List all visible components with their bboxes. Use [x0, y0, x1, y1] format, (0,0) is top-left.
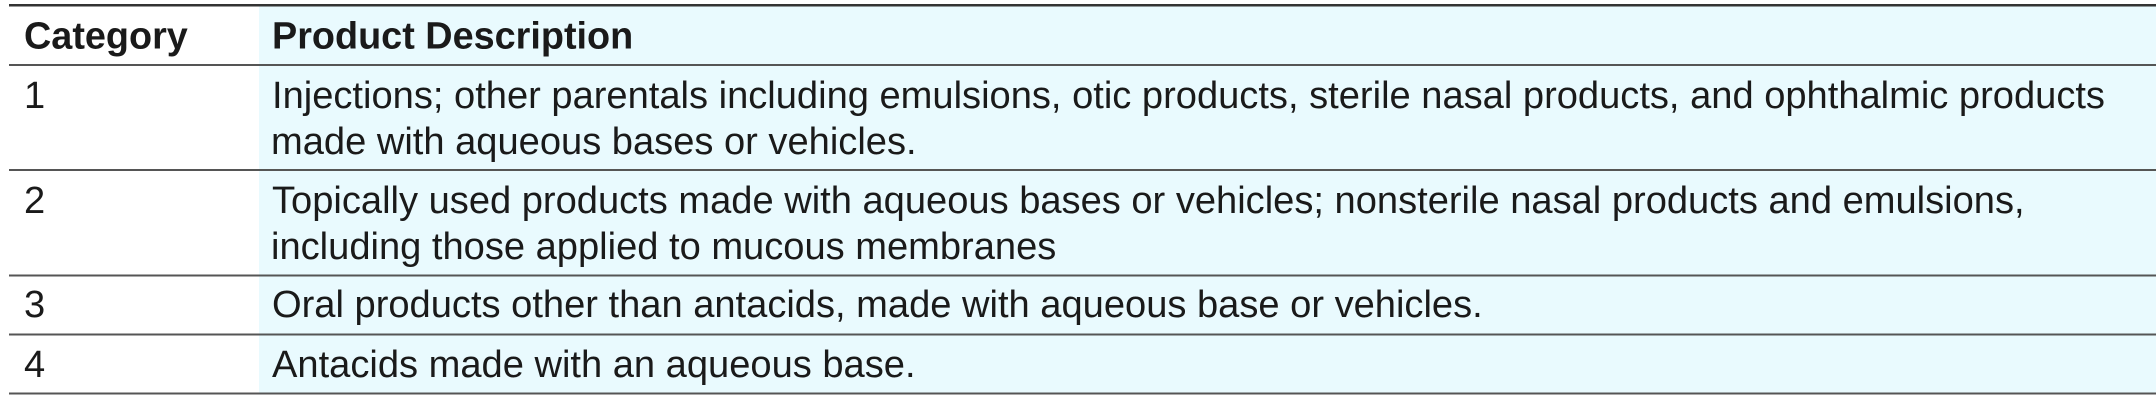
category number 2: 2 — [24, 180, 45, 222]
description of category 3: Oral products other than antacids, made with aqueous base or vehicles. — [272, 284, 1483, 326]
description of category 2: Topically used products made with aqueous bases or vehicles; nonsterile nasal products and emulsions, — [272, 180, 2025, 222]
row 3 — [24, 284, 1483, 326]
description of category 2 — [271, 180, 2025, 268]
category number 4: 4 — [24, 344, 45, 386]
header row — [24, 16, 633, 58]
description of category 2: including those applied to mucous membranes — [271, 226, 1056, 268]
row 4 — [24, 344, 916, 386]
heading: category: Category — [24, 16, 188, 58]
category number 3: 3 — [24, 284, 45, 326]
category number 1: 1 — [24, 75, 45, 117]
description of category 4: Antacids made with an aqueous base. — [272, 344, 916, 386]
description of category 1: Injections; other parentals including emulsions, otic products, sterile nasal products, and ophthalmic products — [272, 75, 2105, 117]
row 1 — [24, 75, 2105, 163]
heading: product description: Product Description — [272, 16, 633, 58]
row 2 — [24, 180, 2025, 268]
description of category 1: made with aqueous bases or vehicles. — [271, 121, 917, 163]
description of category 1 — [271, 75, 2105, 163]
